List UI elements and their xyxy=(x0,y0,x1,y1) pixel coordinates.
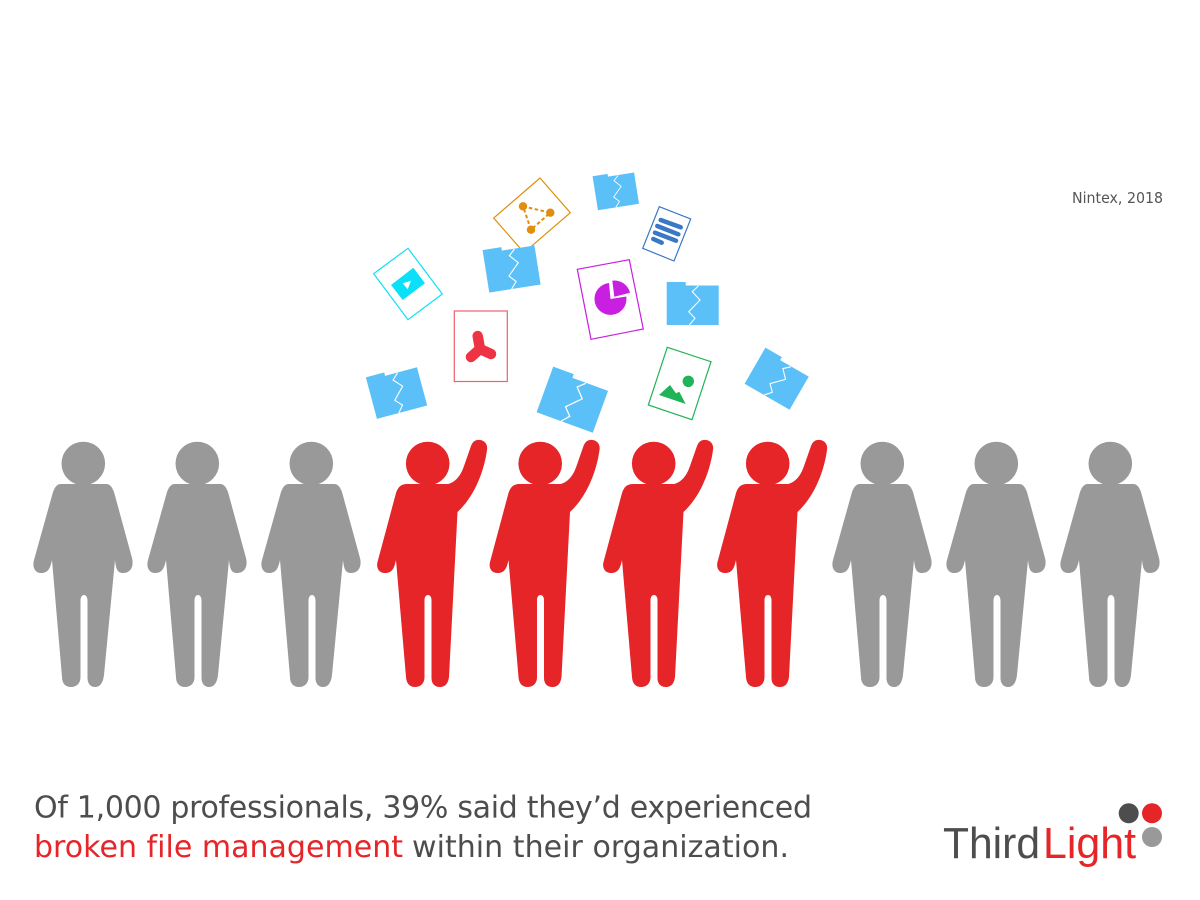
icon: broken folder, large centre xyxy=(537,367,609,433)
grey person 3 xyxy=(261,442,361,687)
caption: within their organization. xyxy=(412,830,789,865)
logo: ThirdLight: Third xyxy=(943,819,1040,868)
icon: broken folder, far right xyxy=(745,348,810,410)
source citation: Nintex, 2018 xyxy=(1072,189,1163,207)
grey person 6 xyxy=(1060,442,1160,687)
logo: ThirdLight: Light xyxy=(1043,819,1136,868)
icon: image file document xyxy=(648,347,711,420)
red person 3, arm raised xyxy=(603,440,713,687)
grey person 2 xyxy=(147,442,247,687)
icon: chart file document xyxy=(577,260,643,339)
caption xyxy=(34,790,812,865)
logo: ThirdLight xyxy=(943,803,1162,868)
caption: broken file management xyxy=(34,830,403,865)
icon: broken folder, centre right xyxy=(667,282,719,325)
icon: PDF file document xyxy=(454,311,507,382)
grey person 4 xyxy=(832,442,932,687)
caption: Of 1,000 professionals, 39% said they’d experienced xyxy=(34,790,812,826)
icon: text file document xyxy=(643,207,691,261)
red person 4, arm raised xyxy=(717,440,827,687)
icon: broken folder, upper left xyxy=(483,242,541,293)
icon: broken folder, top xyxy=(593,170,639,210)
icon: broken folder, lower left xyxy=(366,364,427,419)
grey person 5 xyxy=(946,442,1046,687)
icon: network file document xyxy=(494,178,570,253)
red person 2, arm raised xyxy=(490,440,600,687)
red person 1, arm raised xyxy=(377,440,487,687)
icon: video file document xyxy=(374,248,442,320)
grey person 1 xyxy=(33,442,133,687)
